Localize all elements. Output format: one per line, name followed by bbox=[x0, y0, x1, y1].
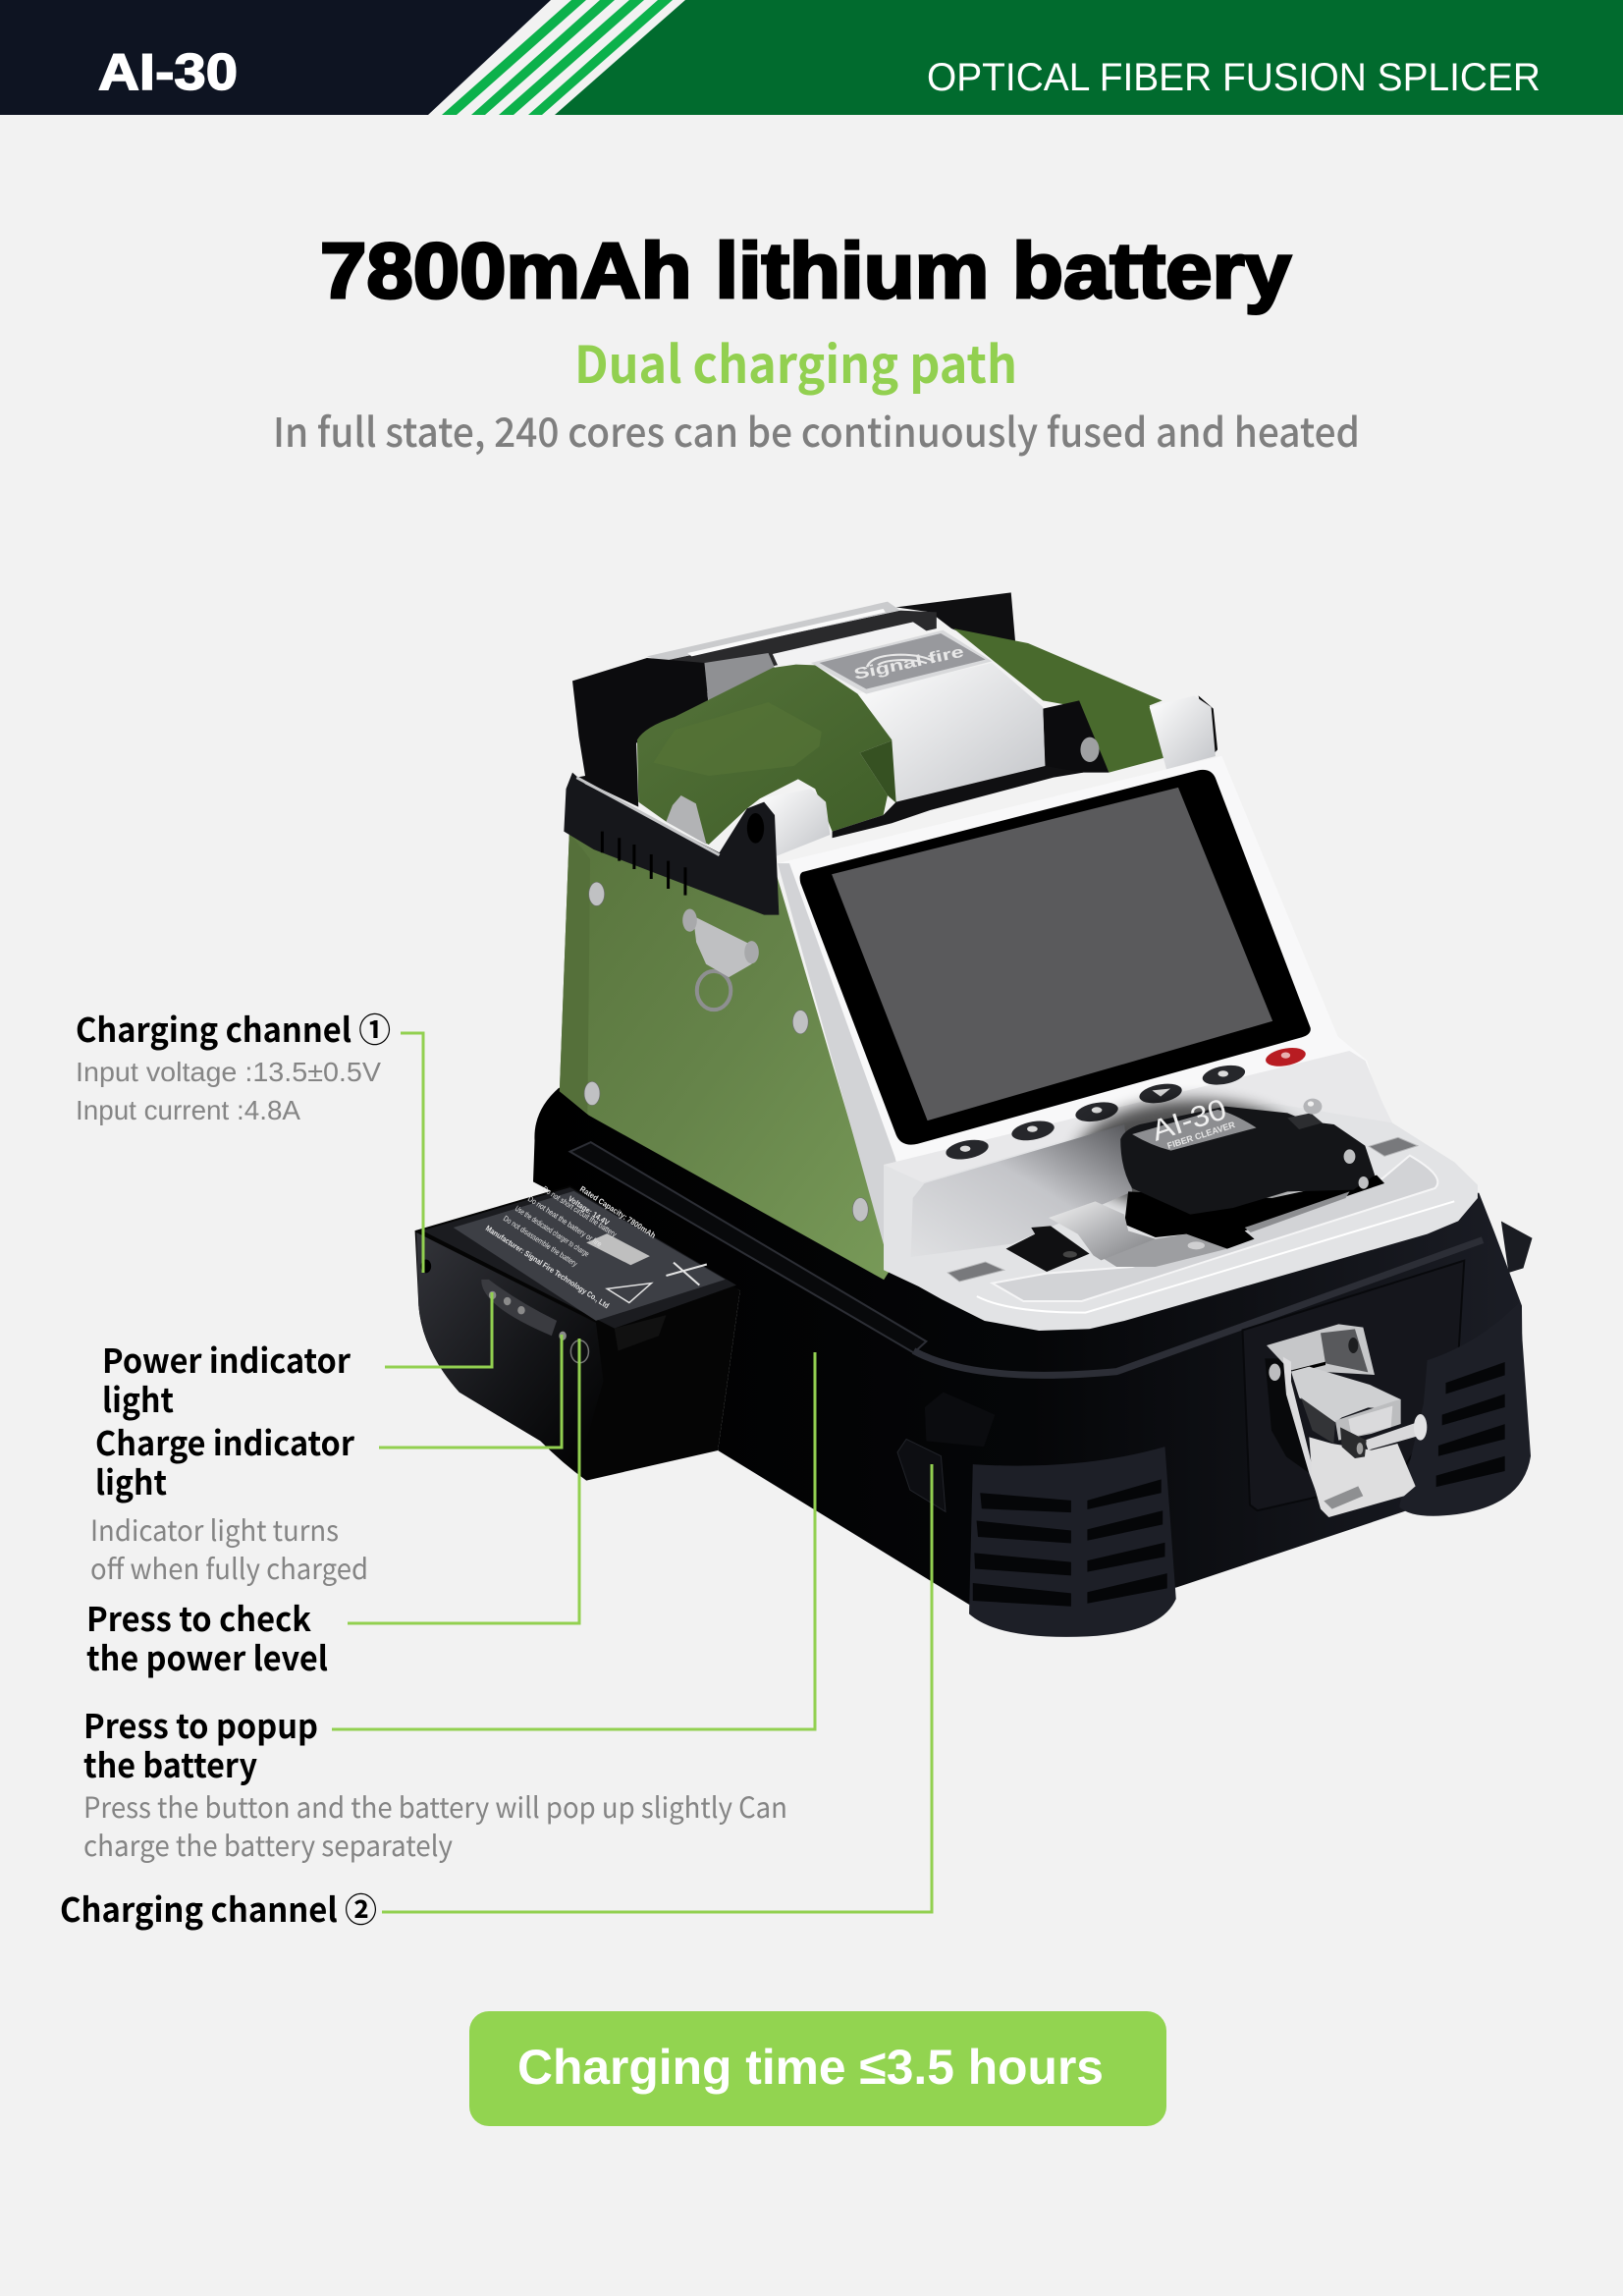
charging time badge bbox=[469, 2011, 1166, 2126]
deck base silver bbox=[884, 1051, 1478, 1331]
black band bbox=[564, 773, 779, 915]
model name: AI-30 bbox=[98, 44, 238, 101]
screen display bbox=[832, 788, 1272, 1121]
left green cover bbox=[637, 665, 893, 845]
battery label text: Rated Capacity: 7800mAh bbox=[578, 1184, 657, 1240]
callout: charging channel 2: Charging channel ② bbox=[60, 1884, 377, 1932]
black under block bbox=[833, 766, 1083, 838]
callout: power indicator light bbox=[102, 1292, 492, 1422]
callout: charge indicator light: Indicator light turns bbox=[90, 1508, 339, 1550]
product photo: fusion splicer bbox=[415, 592, 1533, 1637]
base and battery bbox=[415, 1088, 1533, 1637]
fiber holder bbox=[1006, 1226, 1090, 1272]
cleaver plate bbox=[1132, 1110, 1257, 1151]
hanging bracket and ring bbox=[682, 909, 759, 1010]
callout: press to check the power level: the power level bbox=[86, 1632, 328, 1680]
cleaver pins bbox=[1344, 1149, 1355, 1164]
callout: charge indicator light: off when fully charged bbox=[90, 1547, 368, 1588]
deck surface and cleaver bbox=[911, 1099, 1454, 1313]
latch lever bbox=[1340, 1427, 1367, 1458]
callout: press to check the power level: Press to check bbox=[86, 1593, 311, 1641]
white bar bbox=[773, 622, 927, 665]
cleaver body bbox=[1120, 1107, 1375, 1215]
latch tongue bbox=[1309, 1437, 1416, 1517]
rear right foot bbox=[1399, 1302, 1531, 1516]
callout: charge indicator light bbox=[90, 1335, 562, 1588]
silver center block bbox=[858, 663, 1045, 802]
latch top bracket bbox=[1267, 1324, 1375, 1375]
green title panel bbox=[555, 0, 1623, 115]
cleaver shadow bbox=[1078, 1100, 1311, 1211]
grey windows bbox=[947, 1262, 1004, 1282]
battery label text bbox=[484, 1184, 657, 1310]
channel 1 port bbox=[421, 1260, 431, 1273]
base body bbox=[533, 1088, 1523, 1605]
callout: press to popup the battery: charge the battery separately bbox=[83, 1824, 453, 1865]
callout: press to popup the battery: Press to popup bbox=[83, 1700, 318, 1748]
control buttons bbox=[942, 1045, 1310, 1163]
callout: charging channel 2 bbox=[60, 1464, 932, 1932]
dark model panel bbox=[0, 0, 551, 115]
header banner bbox=[0, 0, 1623, 115]
front panel recess bbox=[1242, 1261, 1464, 1510]
callout: charge indicator light: light bbox=[95, 1456, 167, 1504]
top cover assembly bbox=[564, 592, 1217, 915]
latch back shadow bbox=[1265, 1358, 1311, 1473]
deck recess bbox=[993, 1156, 1437, 1301]
charging time badge: Charging time ≤3.5 hours bbox=[517, 2040, 1104, 2095]
small latch on cover bbox=[666, 795, 707, 845]
callout: press to popup the battery: Press the button and the battery will pop up slightly Can bbox=[83, 1785, 787, 1827]
green side panel bbox=[560, 833, 893, 1280]
latch left arm bbox=[1283, 1357, 1323, 1509]
grey plate bbox=[1101, 1234, 1227, 1267]
callout: charging channel 1: Charging channel ① bbox=[76, 1004, 391, 1052]
callout: press to popup the battery: the battery bbox=[83, 1739, 257, 1787]
corner connectors bbox=[925, 1393, 995, 1447]
callout: charging channel 1 bbox=[76, 1004, 423, 1273]
callout: press to popup the battery bbox=[83, 1352, 815, 1865]
cleaver plate text: FIBER CLEAVER bbox=[1166, 1120, 1237, 1151]
right green cover bbox=[953, 629, 1164, 773]
diagonal stripes bbox=[442, 0, 673, 115]
callout: charge indicator light: Charge indicator bbox=[95, 1417, 354, 1465]
battery label text: Manufacturer: Signal Fire Technology Co., Ltd bbox=[484, 1224, 611, 1310]
latch hasp bbox=[1291, 1367, 1401, 1422]
right side clip bbox=[1501, 1222, 1533, 1273]
screws bbox=[584, 882, 868, 1222]
left hinge bbox=[760, 789, 830, 856]
callout: power indicator light: Power indicator bbox=[102, 1335, 351, 1383]
battery label text: Use the dedicated charger to charge bbox=[514, 1204, 591, 1259]
logo plate bbox=[811, 630, 992, 694]
product type: OPTICAL FIBER FUSION SPLICER bbox=[927, 56, 1541, 99]
description: In full state, 240 cores can be continuously fused and heated bbox=[273, 400, 1360, 459]
right hinge bbox=[1199, 695, 1217, 756]
rear black clamp left bbox=[572, 658, 709, 807]
shadow under handle bbox=[662, 611, 937, 692]
subtitle: Dual charging path bbox=[574, 324, 1017, 398]
battery label text: Voltage: 14.4V bbox=[567, 1194, 612, 1228]
black slot bbox=[1124, 1175, 1384, 1249]
callout: charging channel 1: Input voltage :13.5±0.5V bbox=[76, 1057, 381, 1087]
cleaver plate text: AI-30 bbox=[1148, 1093, 1230, 1148]
sloped deck face bbox=[911, 1124, 1132, 1257]
screen housing bbox=[778, 756, 1390, 1257]
latch rod bbox=[1365, 1422, 1421, 1450]
screen and buttons bbox=[800, 770, 1311, 1163]
deck lip highlight bbox=[977, 1201, 1454, 1313]
front left foot bbox=[969, 1447, 1176, 1637]
clear post bbox=[704, 653, 775, 705]
rear black clamp right bbox=[896, 592, 1015, 643]
callout: power indicator light: light bbox=[102, 1374, 174, 1422]
base rim bbox=[914, 1240, 1483, 1375]
top translucent handle bbox=[647, 602, 900, 661]
top rail bbox=[570, 1142, 926, 1352]
callout: charging channel 1: Input current :4.8A bbox=[76, 1095, 300, 1125]
logo text: Signal fire bbox=[852, 644, 965, 683]
title: 7800mAh lithium battery bbox=[320, 227, 1292, 314]
battery label text: Do not heat the battery or fire bbox=[526, 1194, 604, 1249]
battery pack bbox=[415, 1185, 740, 1481]
battery label text: Do not short circuit the battery bbox=[541, 1184, 619, 1239]
battery label text: Do not disassemble the battery bbox=[502, 1214, 579, 1269]
callout: press to check the power level bbox=[86, 1339, 579, 1680]
screen bezel bbox=[800, 770, 1311, 1145]
latch bbox=[1265, 1324, 1427, 1517]
